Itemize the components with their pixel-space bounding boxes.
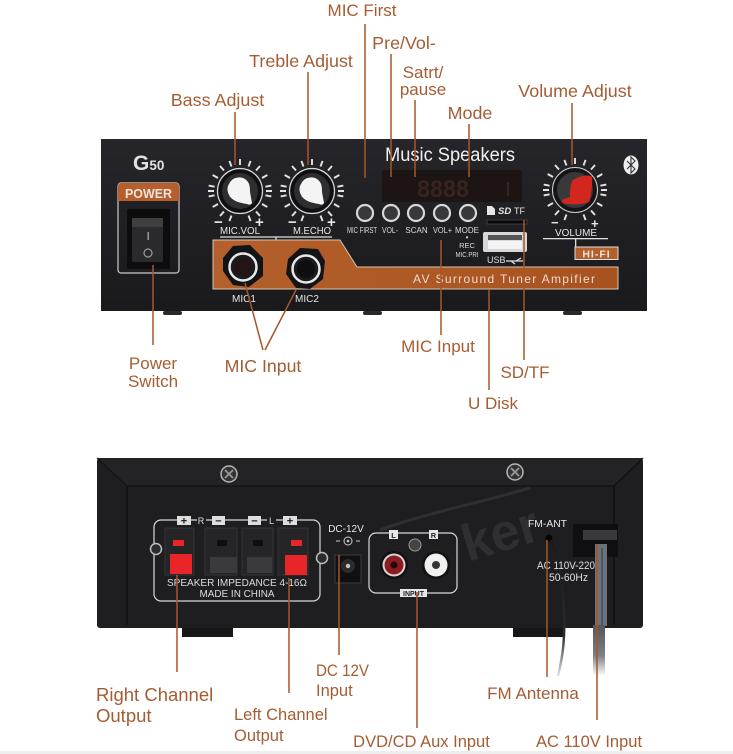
white RCA jack [422, 551, 450, 579]
knob: MIC.VOL: + [255, 214, 264, 231]
label: Bass Adjust: Bass Adjust [171, 90, 264, 110]
label: Volume Adjust: Volume Adjust [518, 81, 632, 101]
DC-12V socket: DC-12V [328, 524, 364, 535]
orange strip with MIC jacks: AV Surround Tuner Ampifier [413, 272, 595, 286]
speaker terminal block: + [287, 516, 293, 528]
RCA input block: L [391, 531, 396, 540]
display and title [382, 145, 522, 203]
button labels: REC [459, 241, 475, 250]
label: MIC First: MIC First [328, 1, 397, 20]
label: Satrt/pause: Satrt/ [403, 63, 444, 82]
speaker terminal block: − [215, 516, 222, 528]
speaker terminal block: SPEAKER IMPEDANCE 4-16Ω [167, 577, 307, 589]
button labels: SCAN [405, 226, 428, 235]
knob: MIC.VOL [208, 159, 272, 237]
red terminals [170, 540, 307, 575]
label: Left Channel Output: Left Channel [234, 706, 328, 724]
model name G50: G50 [133, 152, 164, 175]
label: MIC Input middle: MIC Input [401, 337, 475, 356]
knob: M.ECHO [280, 159, 344, 237]
AC voltage label [537, 560, 595, 584]
label: Right Channel Output: Right Channel [96, 684, 213, 705]
SD and USB ports: SD [498, 206, 511, 217]
speaker terminal block: − [251, 516, 258, 528]
button labels [347, 226, 479, 259]
top screws [221, 464, 523, 482]
power switch panel [118, 183, 179, 273]
MIC1 jack [223, 245, 263, 287]
FM antenna socket and wire [528, 518, 568, 676]
speaker terminal block: L [269, 516, 274, 526]
RCA input block: R [431, 531, 437, 540]
SD and USB ports [483, 206, 527, 265]
speaker terminal block [150, 516, 328, 601]
knob: VOLUME [543, 158, 618, 260]
label: FM Antenna: FM Antenna [487, 684, 579, 703]
button labels: MIC.PRI [456, 250, 478, 259]
label: Mode: Mode [448, 103, 492, 123]
rear feet [182, 628, 233, 637]
display and title: Music Speakers [385, 145, 515, 166]
knob: VOLUME: − [551, 215, 559, 230]
bottom page strip [0, 751, 733, 754]
label: DVD/CD Aux Input: DVD/CD Aux Input [353, 733, 490, 751]
DC-12V socket [328, 524, 364, 583]
label: Satrt/pause: pause [400, 80, 446, 99]
dark terminals [210, 557, 272, 573]
red RCA jack [380, 551, 408, 579]
RCA input block [369, 530, 457, 598]
speaker terminal block: R [198, 516, 205, 526]
label: DC 12V Input: Input [316, 682, 353, 700]
button labels: • [466, 233, 469, 242]
orange leader lines [153, 24, 597, 728]
FM antenna socket and wire: FM-ANT [528, 518, 568, 530]
label: U Disk: U Disk [468, 394, 519, 413]
label: SD/TF: SD/TF [500, 363, 550, 382]
AC voltage label: 50-60Hz [549, 572, 588, 584]
label: DC 12V Input: DC 12V [316, 662, 369, 680]
front panel: amplifier front face [101, 139, 647, 315]
power switch panel: POWER [125, 186, 173, 201]
AC power cord [573, 524, 618, 676]
label: MIC Input left: MIC Input [225, 356, 301, 376]
RCA input block: INPUT [403, 591, 425, 598]
control buttons [357, 205, 476, 221]
display and title: 8888 [417, 176, 469, 203]
knob: VOLUME: + [591, 216, 599, 231]
button labels: MIC FIRST [347, 226, 377, 235]
speaker terminal block: + [181, 516, 187, 528]
AC voltage label: AC 110V-220 [537, 560, 595, 572]
label: AC 110V Input: AC 110V Input [536, 733, 642, 751]
button labels: VOL- [382, 226, 398, 235]
front panel: amplifier front face: MIC2 [295, 294, 319, 305]
SD and USB ports: USB [487, 255, 506, 265]
knob: M.ECHO: + [327, 214, 336, 231]
faint watermark [380, 488, 546, 573]
knob: MIC.VOL: MIC.VOL [220, 225, 260, 237]
knob: VOLUME: HI-FI [582, 248, 611, 260]
label: Power Switch: Power [129, 354, 177, 373]
knob: MIC.VOL: − [214, 214, 223, 231]
knob: VOLUME: VOLUME [555, 227, 597, 239]
MIC2 jack [286, 248, 325, 289]
label: Power Switch: Switch [128, 372, 178, 391]
feet [163, 311, 582, 315]
SD and USB ports: TF [514, 206, 525, 216]
label: Right Channel Output: Output [96, 705, 152, 726]
bluetooth icon [624, 156, 638, 174]
rear panel: amplifier back face [97, 458, 643, 676]
faint watermark: ker [455, 495, 546, 573]
orange strip with MIC jacks [213, 240, 618, 289]
speaker terminal block: MADE IN CHINA [200, 588, 274, 600]
knob: M.ECHO: − [288, 214, 297, 231]
front panel: amplifier front face: MIC1 [232, 294, 256, 305]
side screws [150, 544, 328, 564]
button labels: VOL+ [433, 226, 452, 235]
label: Treble Adjust: Treble Adjust [249, 51, 353, 71]
button labels: MODE [455, 226, 479, 235]
label: Left Channel Output: Output [234, 727, 284, 745]
label: Pre/Vol-: Pre/Vol- [372, 33, 436, 53]
knob: M.ECHO: M.ECHO [293, 225, 331, 237]
